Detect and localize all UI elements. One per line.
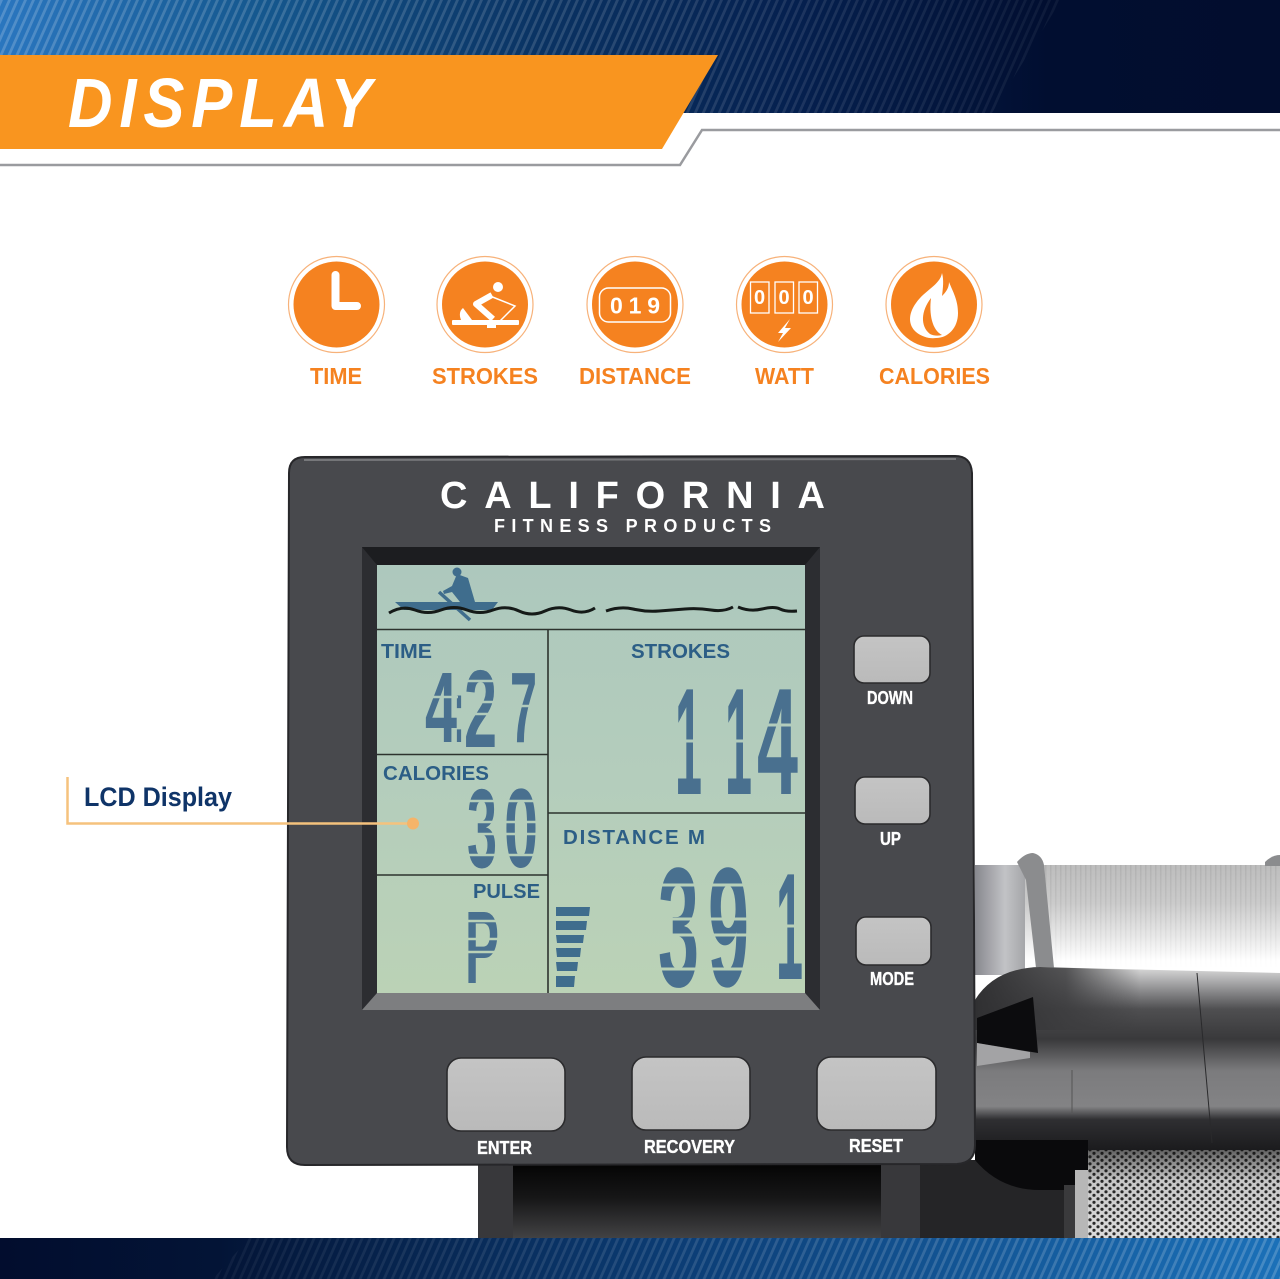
icon: watt: 0 [778,287,790,309]
label: watt: WATT [755,363,814,389]
mount stem [478,1160,920,1238]
time readout: 2 [464,648,497,771]
console panel: 1 [776,842,803,1012]
time readout: : [454,660,464,762]
lower base shadow [975,1140,1088,1190]
time readout: 4 [425,652,457,764]
icon: strokes [437,256,533,352]
time readout [381,640,538,771]
drum [975,853,1280,975]
intensity bars [556,907,590,987]
calories readout: CALORIES [383,762,489,785]
label: distance: DISTANCE [579,363,691,389]
label: strokes: STROKES [432,363,538,389]
strokes readout: STROKES [631,640,730,663]
calories readout: 3 [467,766,497,891]
icon: watt: 0 [754,287,765,309]
calories readout: 0 [504,766,538,891]
header band [0,0,1280,113]
title banner [0,55,718,149]
brand: California: CALIFORNIA [440,475,825,517]
button: up: UP [880,829,901,849]
footer band [0,1238,1280,1279]
label: calories: CALORIES [879,363,990,389]
button: mode: MODE [870,969,914,989]
button: reset: RESET [849,1136,903,1156]
strokes readout [631,640,800,827]
strokes readout: 1 [725,657,752,827]
header rule [0,130,1280,165]
strokes readout: 1 [675,657,702,827]
calories readout [383,762,540,891]
icon: distance [587,256,683,352]
time readout: 7 [510,652,537,764]
button: reset [817,1057,936,1156]
screen bezel [362,547,820,1010]
label: time: TIME [310,363,362,389]
button: recovery [632,1057,750,1157]
callout: LCD Display: LCD Display [84,782,232,812]
button: enter: ENTER [477,1138,532,1158]
speaker grill [1064,1150,1280,1238]
strokes readout: 4 [757,657,798,827]
icon: time [288,256,384,352]
lower base [915,1160,1090,1238]
button: down [854,636,930,708]
distance readout: DISTANCE M [563,826,705,849]
rowing machine body [478,853,1280,1238]
time readout: TIME [381,640,432,663]
water waves [389,607,797,614]
button: enter [447,1058,565,1158]
button: down: DOWN [867,688,913,708]
brand: Fitness Products: FITNESS PRODUCTS [494,516,771,536]
icon: watt: 0 [802,287,814,309]
rower pictogram [395,568,498,620]
LCD screen [377,565,805,1023]
icon: watt [736,256,832,352]
distance readout: 9 [708,833,749,1023]
icon: calories [886,256,982,352]
distance readout [563,826,805,1023]
icon: distance: 019 [610,292,660,318]
title: DISPLAY [68,63,376,142]
button: mode [856,917,931,989]
housing [975,967,1280,1170]
button: up [855,777,930,849]
console panel [287,456,975,1165]
button: recovery: RECOVERY [644,1137,735,1157]
callout: LCD Display [68,777,419,830]
distance readout: 3 [658,833,699,1023]
pulse readout: P [465,890,499,1005]
pulse readout: PULSE [473,880,540,903]
metric icons row [288,256,990,389]
